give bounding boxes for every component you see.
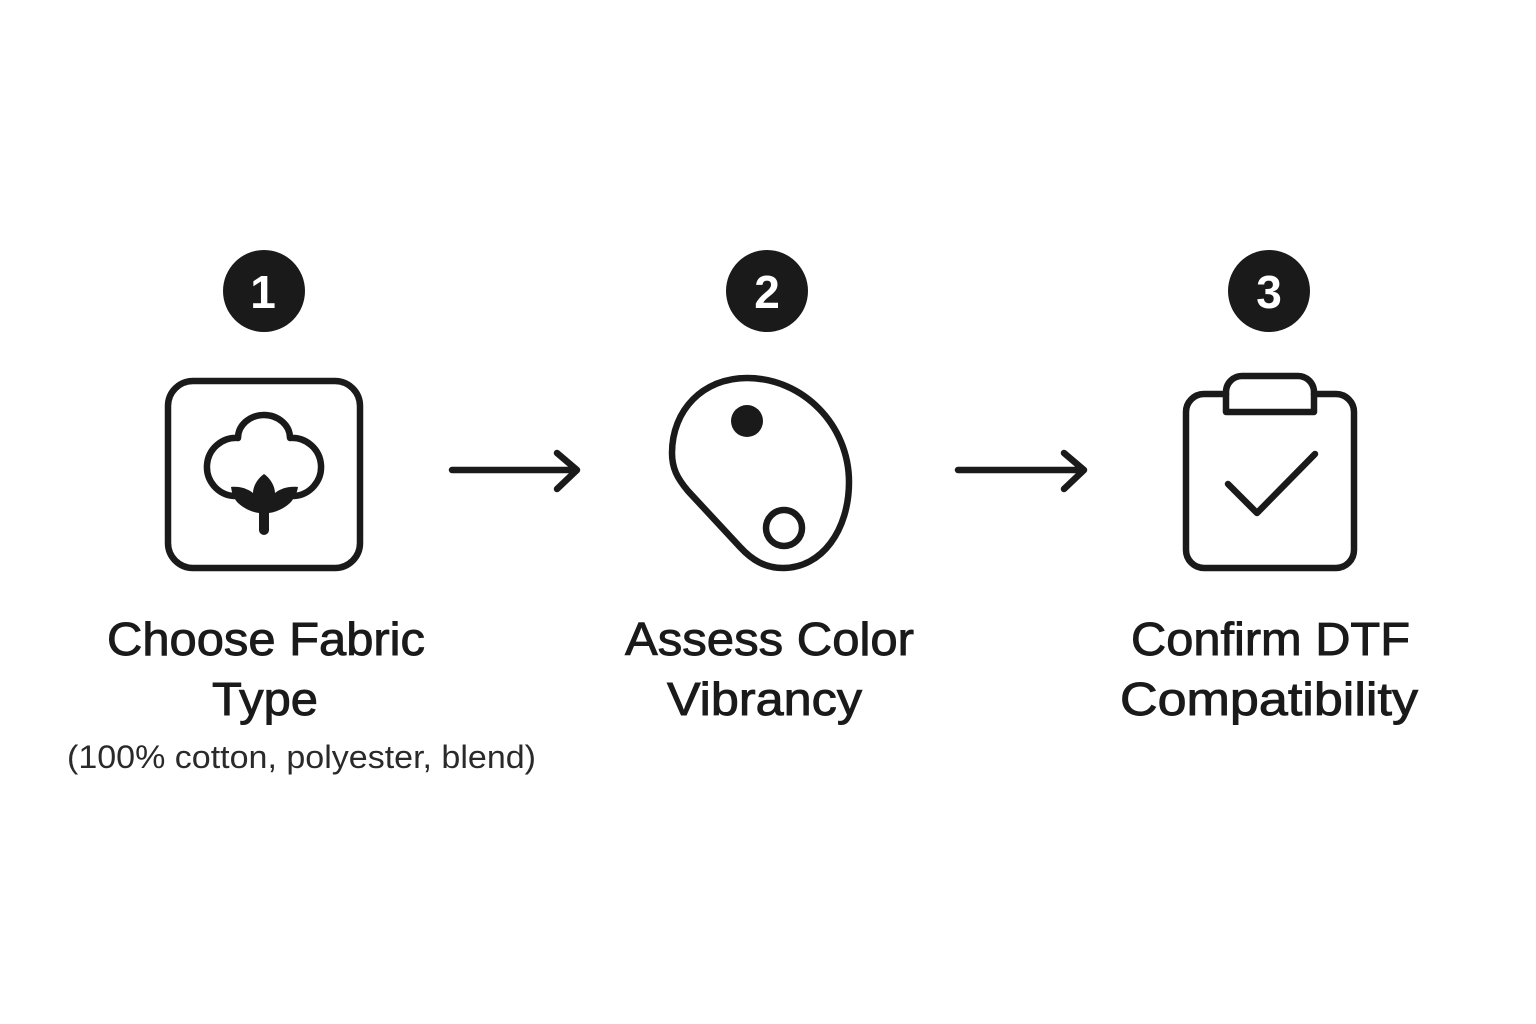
label: assess color vibrancy: Assess Color xyxy=(625,613,914,665)
arrow: step 2 to step 3 xyxy=(958,453,1084,489)
label: confirm dtf compatibility: Compatibility xyxy=(1120,673,1418,725)
icon: clipboard with check mark xyxy=(1186,376,1354,568)
label: confirm dtf compatibility xyxy=(1120,613,1418,725)
arrow: step 1 to step 2 xyxy=(452,453,577,489)
label: choose fabric type: Type xyxy=(212,673,318,725)
step 2 number badge xyxy=(726,250,808,332)
label: assess color vibrancy xyxy=(625,613,914,725)
step 3 number badge xyxy=(1228,250,1310,332)
step 3 number badge: 3 xyxy=(1256,266,1282,318)
label: choose fabric type: Choose Fabric xyxy=(107,613,425,665)
step 2 number badge: 2 xyxy=(754,266,780,318)
label: confirm dtf compatibility: Confirm DTF xyxy=(1131,613,1410,665)
step 1 number badge: 1 xyxy=(250,266,276,318)
label: assess color vibrancy: Vibrancy xyxy=(667,673,862,725)
step 1 number badge xyxy=(223,250,305,332)
icon: cotton boll in rounded square xyxy=(168,381,360,568)
icon: color palette xyxy=(672,378,849,568)
note: fabric options: (100% cotton, polyester, blend) xyxy=(67,739,536,775)
label: choose fabric type xyxy=(107,613,425,725)
